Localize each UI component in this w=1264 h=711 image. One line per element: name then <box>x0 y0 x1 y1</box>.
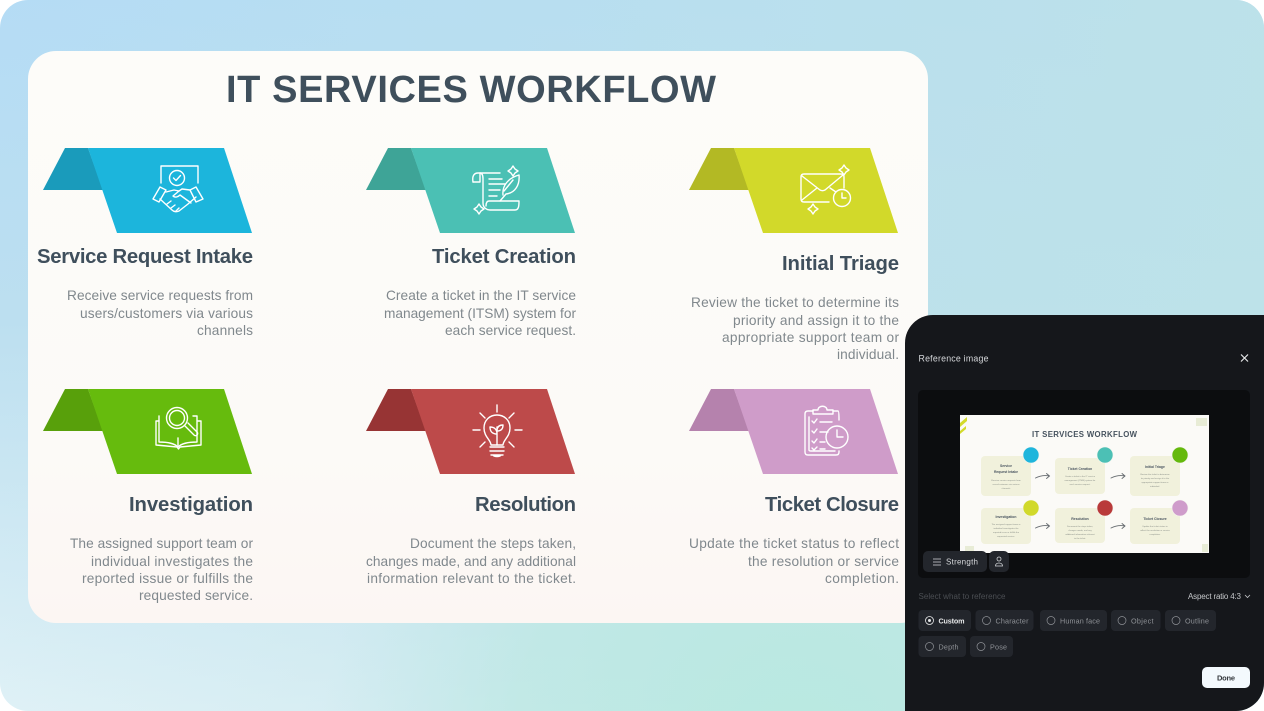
icon: scroll and quill <box>473 166 519 214</box>
step: Service Request Intake <box>37 148 253 338</box>
heading: Ticket Creation <box>432 246 576 268</box>
description: appropriate support team or <box>722 330 899 345</box>
option: Custom: Custom <box>938 616 964 626</box>
description: channels <box>197 323 253 338</box>
button: Strength <box>923 551 987 572</box>
option: Pose: Pose <box>990 642 1007 652</box>
description <box>366 536 576 586</box>
description <box>70 536 253 603</box>
thumbnail card: Ticket Creation: each service request. <box>1070 483 1091 486</box>
ribbon: green <box>43 389 252 474</box>
ribbon: teal <box>366 148 575 233</box>
aspect ratio selector: Aspect ratio 4:3 <box>1188 592 1242 601</box>
thumbnail card: Resolution: to the ticket. <box>1074 537 1086 540</box>
panel: workflow slide <box>28 51 928 623</box>
heading: Initial Triage <box>782 253 899 275</box>
description: priority and assign it to the <box>733 313 899 328</box>
title: IT SERVICES WORKFLOW <box>226 69 716 111</box>
thumbnail card: Ticket Creation: management (ITSM) system for <box>1065 479 1096 482</box>
description: changes made, and any additional <box>366 554 576 569</box>
description: completion. <box>825 571 899 586</box>
thumbnail arrows <box>1036 474 1125 528</box>
description: Receive service requests from <box>67 288 253 303</box>
icon: book with magnifier <box>156 408 201 449</box>
preview area <box>918 390 1250 578</box>
button: Done: Done <box>1217 674 1235 682</box>
thumbnail card: Ticket Closure: reflect the resolution or service <box>1140 529 1171 532</box>
description <box>691 295 899 362</box>
thumbnail card: Service Request Intake: Request Intake <box>994 470 1018 474</box>
description: individual. <box>837 347 899 362</box>
thumbnail card: Ticket Creation: Ticket Creation <box>1068 467 1092 471</box>
ribbon: red <box>366 389 575 474</box>
option: Object <box>1111 610 1160 631</box>
thumbnail card: Ticket Creation: Create a ticket in the IT service <box>1065 475 1096 478</box>
step: Resolution <box>366 389 576 586</box>
description: reported issue or fulfills the <box>82 571 253 586</box>
heading: Investigation <box>129 494 253 516</box>
thumbnail card: Initial Triage: individual. <box>1150 486 1160 488</box>
thumbnail card: Resolution: Document the steps taken, <box>1067 525 1093 528</box>
thumbnail card: Resolution: Resolution <box>1071 517 1089 521</box>
thumbnail card: Investigation: requested service. <box>997 535 1015 538</box>
description: the resolution or service <box>748 554 899 569</box>
thumbnail card: Service Request Intake: Receive service requests from <box>991 479 1021 482</box>
description: Create a ticket in the IT service <box>386 288 576 303</box>
thumbnail card: Investigation: individual investigates the <box>994 527 1019 530</box>
icon: envelope with clock <box>801 165 850 214</box>
icon: close <box>1241 354 1248 362</box>
description <box>384 288 576 338</box>
option: Depth: Depth <box>938 642 958 652</box>
description: each service request. <box>445 323 576 338</box>
description: information relevant to the ticket. <box>367 571 576 586</box>
thumbnail card: Resolution <box>1055 508 1105 543</box>
option: Character <box>976 610 1034 631</box>
icon: clipboard checklist with clock <box>805 406 848 455</box>
thumbnail card: Investigation <box>981 508 1031 544</box>
thumbnail card: Investigation: The assigned support team or <box>991 523 1021 526</box>
option: Outline: Outline <box>1185 616 1209 626</box>
ribbon: pink <box>689 389 898 474</box>
option: Outline <box>1165 610 1216 631</box>
ribbon: blue <box>43 148 252 233</box>
description: Update the ticket status to reflect <box>689 536 899 551</box>
thumbnail card: Ticket Closure: Update the ticket status to <box>1142 525 1168 528</box>
thumbnail card: Service Request Intake <box>981 456 1031 496</box>
thumbnail card: Ticket Closure <box>1130 508 1180 544</box>
description <box>689 536 899 586</box>
description: individual investigates the <box>91 554 253 569</box>
description: management (ITSM) system for <box>384 306 576 321</box>
button: person <box>989 551 1009 572</box>
thumbnail icon badges <box>1023 447 1188 516</box>
step: Investigation <box>43 389 253 603</box>
thumbnail card: Resolution: changes made, and any <box>1068 530 1093 532</box>
thumbnail card: Service Request Intake: users/customers via various <box>992 483 1020 486</box>
thumbnail card: Service Request Intake: Service <box>1000 464 1012 468</box>
thumbnail card: Ticket Closure: completion. <box>1149 533 1161 536</box>
thumbnail slide <box>960 415 1209 553</box>
thumbnail card: Resolution: additional information relevant <box>1065 533 1095 536</box>
option: Human face <box>1040 610 1107 631</box>
description <box>67 288 253 338</box>
option: Depth <box>918 636 966 657</box>
thumbnail card: Ticket Closure: Ticket Closure <box>1143 517 1167 521</box>
description: Review the ticket to determine its <box>691 295 899 310</box>
dialog title: Reference image <box>918 354 989 364</box>
thumbnail card: Initial Triage: Review the ticket to determine <box>1140 473 1170 476</box>
thumbnail card: Initial Triage: Initial Triage <box>1145 465 1165 469</box>
button: Strength: Strength <box>946 558 978 566</box>
panel: reference image dialog <box>905 315 1264 711</box>
thumbnail card: Initial Triage <box>1130 456 1180 496</box>
thumbnail card: Initial Triage: appropriate support team or <box>1142 481 1169 484</box>
icon: handshake with certificate <box>153 166 203 212</box>
option: Human face: Human face <box>1060 616 1100 626</box>
step: Initial Triage <box>689 148 899 362</box>
option: Pose <box>970 636 1013 657</box>
thumbnail card: Ticket Creation <box>1055 458 1105 494</box>
thumbnail card: Initial Triage: its priority and assign it to the <box>1141 477 1170 480</box>
heading: Resolution <box>475 494 576 516</box>
heading: Ticket Closure <box>765 494 899 516</box>
step: Ticket Creation <box>366 148 576 338</box>
thumbnail title: IT SERVICES WORKFLOW <box>1032 430 1138 439</box>
description: users/customers via various <box>80 306 253 321</box>
thumbnail card: Service Request Intake: channels <box>1002 488 1011 490</box>
thumbnail card: Investigation: reported issue or fulfills the <box>993 531 1020 534</box>
heading: Service Request Intake <box>37 246 253 268</box>
step: Ticket Closure <box>689 389 899 586</box>
ribbon: yellow <box>689 148 898 233</box>
description: Document the steps taken, <box>410 536 576 551</box>
description: requested service. <box>139 588 253 603</box>
description: The assigned support team or <box>70 536 253 551</box>
option: Custom <box>918 610 971 631</box>
button: Done <box>1202 667 1250 688</box>
option: Object: Object <box>1131 616 1154 626</box>
label: select what to reference: Select what to reference <box>918 592 1006 601</box>
option: Character: Character <box>996 616 1029 626</box>
icon: light bulb with sprout <box>473 405 522 456</box>
thumbnail card: Investigation: Investigation <box>996 515 1016 519</box>
